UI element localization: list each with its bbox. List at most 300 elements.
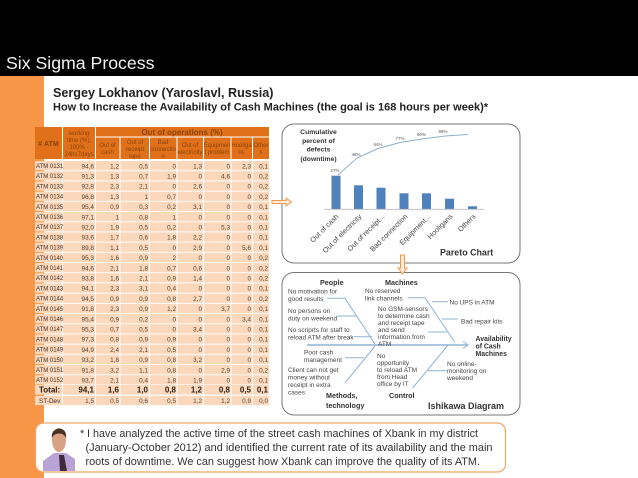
note text: roots of downtime. We can suggest how Xbank can improve the quality of its ATM. (86, 456, 480, 468)
table values: out of electricity: 0 (198, 306, 202, 313)
table values: bad connection: 1,8 (167, 378, 176, 384)
icon: author portrait (43, 428, 75, 471)
table values: bad connection: 1,2 (167, 306, 176, 313)
table values: out of electricity: 0 (198, 214, 202, 221)
cause labels: No UPS in ATM (450, 300, 495, 306)
table header: Out of (182, 143, 199, 149)
cumulative labels: 90% (417, 132, 426, 137)
table values: out of electricity: 0 (198, 194, 202, 201)
table totals row: 94,1 (78, 386, 95, 394)
chart heading: defects (307, 146, 331, 154)
table values: out of receipt tape: 0,6 (139, 235, 148, 242)
table values: hooligans: 2,3 (242, 163, 251, 170)
table header: working (68, 131, 89, 137)
cause labels: information from (378, 334, 425, 341)
table header: # ATM (38, 141, 59, 148)
category labels: Out of receipt... (345, 212, 386, 253)
cause labels: from Head (377, 374, 408, 381)
table values: bad connection: 0,8 (167, 296, 176, 303)
table values: hooligans: 5,6 (242, 245, 251, 252)
table totals row: 1,0 (137, 386, 149, 394)
cause labels: weekend (446, 375, 473, 382)
table values: out of cash: 1,6 (110, 255, 119, 262)
table values: out of cash: 1,9 (110, 224, 119, 232)
table values: bad connection: 0,9 (167, 337, 176, 344)
table values: others: 0,1 (259, 204, 268, 211)
table values: out of receipt tape: 0,9 (139, 255, 148, 262)
table values: bad connection: 1,8 (167, 235, 176, 242)
arrow: table to pareto (272, 198, 292, 206)
table values: others: 0,1 (259, 378, 268, 384)
table values: bad connection: 0,2 (167, 204, 176, 211)
table values: out of electricity: 0 (198, 224, 202, 232)
cumulative labels (330, 129, 448, 173)
table values: working time: 94,6 (82, 163, 94, 170)
table values: others: 0,0 (259, 398, 268, 405)
table values: others: 0,2 (259, 184, 268, 191)
table values: out of electricity: 1,4 (193, 276, 202, 282)
table values: equipment problem: 0 (226, 204, 230, 211)
table values: out of electricity: 0,6 (193, 265, 202, 272)
cause labels: opportunity (377, 360, 410, 367)
category labels (308, 212, 478, 255)
table values: hooligans: 0 (247, 214, 251, 221)
cause labels (288, 288, 503, 396)
table values: out of receipt tape: 0,5 (139, 245, 148, 252)
cause labels: and send (378, 327, 405, 334)
table row labels: ATM 0132 (36, 174, 64, 180)
table values: out of cash: 1,3 (110, 194, 119, 201)
cause labels: good results (288, 296, 324, 303)
table values: working time: 92,8 (82, 184, 94, 191)
table values: equipment problem: 0 (226, 214, 230, 221)
category: methods, technology (326, 391, 364, 410)
cause labels: Poor cash (304, 350, 334, 356)
table values: bad connection: 0 (172, 326, 176, 334)
table values: out of receipt tape: 1,1 (139, 367, 148, 374)
table values: out of receipt tape: 0,5 (139, 326, 148, 334)
table row labels: ST-Dev (39, 398, 61, 405)
table values: equipment problem: 0 (226, 326, 230, 334)
table values: working time: 91,8 (82, 306, 94, 313)
table values: out of receipt tape: 1,8 (139, 265, 148, 272)
table values: hooligans: 0 (247, 367, 251, 374)
table values: out of receipt tape: 2,1 (139, 276, 148, 282)
table values: working time: 97,1 (82, 214, 94, 221)
table values: working time: 92,0 (82, 224, 94, 232)
category: people: People (320, 278, 344, 287)
table values: bad connection: 0,5 (167, 398, 176, 405)
table values: bad connection: 0,5 (167, 347, 176, 354)
table values: out of receipt tape: 0,7 (139, 174, 148, 180)
table values: out of cash (110, 163, 119, 405)
table row labels (36, 164, 64, 405)
table values: hooligans: 0 (247, 255, 251, 262)
chart heading: (downtime) (300, 156, 337, 163)
table header: tape (129, 154, 141, 160)
category labels: Out of electricity (321, 212, 364, 255)
table values: out of electricity: 1,9 (193, 378, 202, 384)
cause labels: Bad repair kits (461, 318, 503, 326)
table values: out of electricity: 1,3 (193, 163, 202, 170)
table values: others: 0,1 (259, 306, 268, 313)
table values: others: 0,1 (259, 163, 268, 170)
category labels: Equipment... (398, 212, 432, 247)
table values: working time: 95,4 (82, 204, 94, 211)
table values: out of cash: 0,9 (110, 316, 119, 323)
table values: others: 0,1 (259, 235, 268, 242)
table values: out of cash: 1,6 (110, 276, 119, 282)
table values: bad connection: 0 (172, 163, 176, 170)
table values: out of receipt tape: 0,9 (139, 306, 148, 313)
table values: others: 0,2 (259, 174, 268, 180)
table values: hooligans: 0 (247, 265, 251, 272)
note text: * (80, 428, 85, 440)
table values: equipment problem: 4,6 (221, 174, 230, 180)
table values: working time: 89,8 (82, 245, 94, 252)
table values: working time: 94,1 (82, 286, 94, 293)
note text (80, 428, 492, 468)
table values: working time: 94,9 (82, 347, 94, 354)
table values: out of cash: 1,8 (110, 357, 119, 364)
top black banner (0, 0, 638, 76)
table values: bad connection: 0,8 (167, 357, 176, 364)
table row labels: ATM 0151 (36, 368, 64, 374)
category labels: Hooligans (425, 212, 455, 241)
table header: s (260, 150, 262, 156)
table values: hooligans (242, 163, 251, 405)
table row stripes (35, 161, 269, 405)
table values: equipment problem: 0 (226, 163, 230, 170)
table values: out of receipt tape: 0,9 (139, 357, 148, 364)
table values: hooligans: 0 (247, 174, 251, 180)
cumulative line (338, 134, 468, 175)
effect label: Machines (476, 351, 507, 358)
table values: out of electricity: 2,7 (193, 296, 202, 303)
table values: bad connection: 0,7 (167, 265, 176, 272)
cause labels: office by IT (377, 381, 409, 388)
table values: out of cash: 0,5 (110, 398, 119, 405)
table values: hooligans: 0 (247, 326, 251, 334)
table values: equipment problem: 2,9 (221, 367, 230, 374)
table row labels: ATM 0136 (36, 215, 64, 221)
table header: cash (101, 150, 114, 156)
cause labels: to reload ATM (377, 367, 417, 374)
table values: bad connection: 0,7 (167, 194, 176, 201)
panel: pareto chart (282, 124, 520, 263)
table values: out of receipt tape: 1 (144, 194, 148, 201)
table values: equipment problem: 0 (226, 276, 230, 282)
table values: out of receipt tape: 0,6 (139, 398, 148, 405)
table values: working time: 93,6 (82, 235, 94, 242)
table values: equipment problem: 0 (226, 245, 230, 252)
table header: 24hs7days (64, 152, 94, 158)
table values: working time: 94,6 (82, 265, 94, 272)
table values: hooligans: 0 (247, 235, 251, 242)
table values: out of cash: 0,8 (110, 337, 119, 344)
table values: out of cash: 2,4 (110, 347, 119, 354)
cumulative labels: 77% (395, 136, 405, 141)
pareto bars (332, 176, 477, 209)
table header: t problem (204, 150, 230, 156)
table row labels: ATM 0137 (36, 225, 64, 231)
cause labels: and receipt tape (378, 320, 425, 327)
slide title: Six Sigma Process (6, 53, 155, 73)
table values: hooligans: 0 (247, 306, 251, 313)
table values: others: 0,1 (259, 286, 268, 293)
table row labels: ATM 0134 (36, 195, 64, 201)
table values: others: 0,1 (259, 326, 268, 334)
effect label: Availability (476, 336, 512, 343)
table values: out of receipt tape: 0,9 (139, 296, 148, 303)
table values: others: 0,2 (259, 265, 268, 272)
table values: hooligans: 0 (247, 184, 251, 191)
cause labels: No persons on (288, 308, 331, 315)
heading: Sergey Lokhanov (Yaroslavl, Russia) (53, 86, 273, 100)
table values: working time: 95,4 (82, 316, 94, 323)
cumulative labels: 27% (330, 168, 340, 173)
table values: others: 0,1 (259, 357, 268, 364)
table values: equipment problem: 0 (226, 184, 230, 191)
table values: bad connection (167, 163, 176, 405)
table values: hooligans: 0 (247, 194, 251, 201)
table values: equipment problem: 0 (226, 265, 230, 272)
table values: bad connection: 1,9 (167, 174, 176, 180)
table values: others: 0,1 (259, 316, 268, 323)
table values: equipment problem (221, 163, 230, 405)
table values: out of cash: 2,3 (110, 286, 119, 293)
effect label (476, 336, 512, 358)
table values: equipment problem: 0 (226, 378, 230, 384)
effect label: of Cash (476, 344, 501, 350)
category labels: Others (456, 212, 478, 234)
table values: equipment problem: 0 (226, 316, 230, 323)
table values: out of cash: 1,7 (110, 235, 119, 242)
table header: n (161, 154, 165, 160)
table values: out of electricity: 2,6 (193, 184, 202, 191)
diagram title: Ishikawa Diagram (428, 401, 504, 411)
category: methods, technology: technology (326, 401, 364, 410)
table row labels: ATM 0143 (36, 286, 64, 292)
table row labels: ATM 0145 (36, 307, 64, 313)
table values: equipment problem: 0 (226, 194, 230, 201)
table values: hooligans: 0,9 (242, 398, 251, 405)
orange side bar (0, 76, 44, 478)
table totals row: 0,5 (240, 386, 252, 394)
table values: others: 0,1 (259, 224, 268, 232)
cause labels: duty on weekend (288, 316, 338, 322)
table totals row: 0,8 (219, 386, 231, 394)
table values: out of receipt tape: 0,5 (139, 224, 148, 232)
table values: out of receipt tape (139, 163, 148, 405)
table values: hooligans: 0 (247, 276, 251, 282)
table values: out of cash: 0,9 (110, 296, 119, 303)
table row labels: ATM 0147 (36, 327, 64, 333)
table header: Out of operations (%) (141, 128, 223, 137)
table values: working time: 95,3 (82, 255, 94, 262)
table values: out of electricity: 0 (198, 255, 202, 262)
table values: out of cash: 0,7 (110, 326, 119, 334)
table values: out of receipt tape: 0,3 (139, 204, 148, 211)
table values: out of cash: 1,3 (110, 174, 119, 180)
table row labels: ATM 0148 (36, 337, 64, 343)
note text: I have analyzed the active time of the street cash machines of Xbank in my district (87, 428, 478, 440)
table values: out of receipt tape: 0,4 (139, 378, 148, 384)
table header: Out of (127, 140, 144, 146)
table row labels: ATM 0142 (36, 276, 64, 282)
ATM data table (35, 127, 269, 406)
cumulative labels: 46% (351, 152, 361, 157)
panel: ishikawa diagram (282, 272, 520, 415)
cumulative labels: 64% (373, 142, 383, 147)
table row labels: ATM 0133 (36, 184, 64, 190)
table values: out of electricity: 3,1 (193, 204, 202, 211)
table totals row (78, 386, 269, 394)
table column separators (62, 160, 253, 406)
table values: equipment problem: 0 (226, 255, 230, 262)
cause labels: ATM (378, 341, 391, 348)
table values: out of electricity: 3,4 (193, 326, 202, 334)
table values: hooligans: 0 (247, 347, 251, 354)
table values: equipment problem: 0 (226, 347, 230, 354)
table values: others: 0,2 (259, 367, 268, 374)
fishbone lines (307, 298, 468, 388)
table row labels: ATM 0150 (36, 358, 64, 364)
table values: hooligans: 3,4 (242, 316, 251, 323)
table values: equipment problem: 3,7 (221, 306, 230, 313)
category: control: Control (389, 391, 415, 400)
cause labels: No online- (447, 361, 477, 368)
table values: out of receipt tape: 2,1 (139, 184, 148, 191)
cause labels: to determine cash (378, 313, 430, 320)
table totals row: 0,1 (257, 386, 269, 394)
table values: others: 0,1 (259, 245, 268, 252)
table header: Bad (158, 140, 168, 146)
cause labels: cases (288, 390, 306, 396)
panel: author note (36, 423, 506, 472)
chart heading (300, 129, 337, 163)
table values: out of receipt tape: 0,8 (139, 214, 148, 221)
table values: bad connection: 0,4 (167, 286, 176, 293)
cause labels: reload ATM after break (288, 334, 354, 342)
table values: out of cash: 0,9 (110, 204, 119, 211)
table values: working time: 93,7 (82, 378, 94, 384)
table values: out of receipt tape: 0,2 (139, 316, 148, 323)
table header: Other (253, 143, 269, 149)
cause labels: No scriprts for staff to (288, 327, 350, 334)
table values: out of electricity: 0 (198, 286, 202, 293)
table values: others: 0,2 (259, 296, 268, 303)
table values: others: 0,1 (259, 337, 268, 344)
table values: others: 0,1 (259, 214, 268, 221)
table values: working time: 91,3 (82, 174, 94, 180)
table values: others: 0,1 (259, 347, 268, 354)
table totals row: 1,6 (108, 386, 120, 394)
table header: connectio (150, 147, 177, 153)
table header: 100% - (69, 145, 89, 151)
table row labels: ATM 0131 (36, 164, 64, 170)
table header: time (%), (67, 138, 91, 144)
heading: How to Increase the Availability of Cash Machines (the goal is 168 hours per week)* (53, 102, 489, 114)
table values: bad connection: 0,8 (167, 367, 176, 374)
table values: out of cash: 3,2 (110, 367, 119, 374)
table values: out of cash: 2,1 (110, 265, 119, 272)
table values: out of electricity: 3,2 (193, 357, 202, 364)
table values: bad connection: 0 (172, 316, 176, 323)
table row labels: ATM 0135 (36, 205, 64, 211)
table values: others: 0,2 (259, 276, 268, 282)
table values: hooligans: 0 (247, 337, 251, 344)
category labels: Bad connection (368, 212, 409, 253)
table values: others: 0,2 (259, 194, 268, 201)
table values: out of cash: 1,1 (110, 245, 119, 252)
table values: out of receipt tape: 3,1 (139, 286, 148, 293)
table row labels: ATM 0139 (36, 246, 64, 252)
table values: equipment problem: 0 (226, 357, 230, 364)
table values: equipment problem: 0 (226, 337, 230, 344)
table values: hooligans: 0 (247, 286, 251, 293)
table values: hooligans: 0 (247, 296, 251, 303)
table values: working time: 1,5 (85, 398, 94, 405)
cause labels: No reserved (365, 288, 401, 295)
cause labels: money without (288, 374, 330, 382)
table values: out of electricity: 0 (198, 337, 202, 344)
table values: equipment problem: 0 (226, 235, 230, 242)
cause labels: link channels (365, 296, 403, 302)
chart title: Pareto Chart (440, 248, 493, 258)
chart axis (324, 208, 484, 210)
category: machines: Machines (385, 278, 418, 287)
cause labels: No (377, 353, 386, 360)
cumulative labels: 99% (438, 129, 448, 134)
table values: working time: 96,8 (82, 194, 94, 201)
table row labels: ATM 0152 (36, 378, 64, 384)
table values: bad connection: 0 (172, 245, 176, 252)
table values: equipment problem: 5,3 (221, 224, 230, 232)
table totals row: 0,8 (165, 386, 177, 394)
table header (35, 127, 269, 160)
table row labels: ATM 0138 (36, 235, 64, 241)
table header: ns (238, 150, 245, 156)
table values: out of electricity: 0 (198, 316, 202, 323)
table values: equipment problem: 0 (226, 286, 230, 293)
table values: out of electricity: 0 (198, 367, 202, 374)
table totals row: 1,2 (191, 386, 203, 394)
table values: out of cash: 1,2 (110, 163, 119, 170)
cause labels: management (304, 357, 342, 364)
table header: Hooliga (231, 143, 252, 149)
table values: working time: 93,8 (82, 276, 94, 282)
table values: equipment problem: 0 (226, 296, 230, 303)
table values: out of receipt tape: 0,5 (139, 163, 148, 170)
chart heading: percent of (302, 138, 336, 145)
cause labels: monitoring on (447, 368, 487, 375)
table values: out of electricity (193, 163, 202, 405)
table values: working time: 93,2 (82, 357, 94, 364)
note text: (January-October 2012) and identified the current rate of its availability and the main (86, 442, 492, 454)
chart heading: Cumulative (300, 129, 337, 136)
heading (53, 86, 489, 114)
table values: equipment problem: 1,2 (221, 398, 230, 405)
category labels: Out of cash (308, 212, 340, 244)
cause labels: Client can not get (288, 367, 339, 374)
table values: hooligans: 0 (247, 204, 251, 211)
table values: bad connection: 0,9 (167, 276, 176, 282)
category: methods, technology: Methods, (326, 391, 358, 400)
table values: out of cash: 2,3 (110, 184, 119, 191)
cause labels: No motivation for (288, 288, 338, 296)
table values: out of electricity: 1,2 (193, 398, 202, 405)
